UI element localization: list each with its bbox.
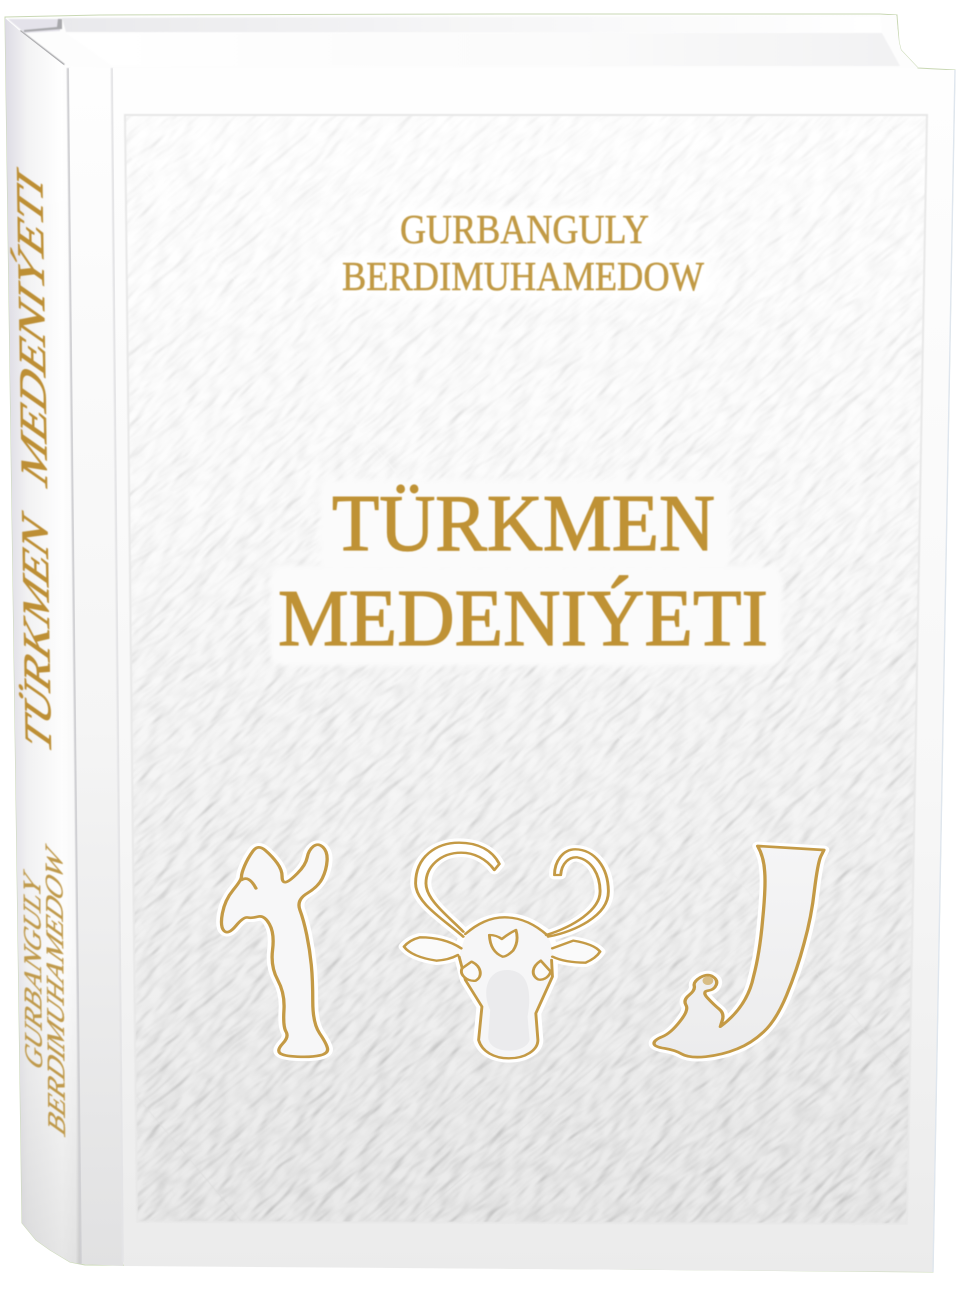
spine hinge groove	[68, 68, 81, 1264]
spine	[5, 18, 81, 1264]
book title: TÜRKMEN	[332, 480, 715, 568]
author name: BERDIMUHAMEDOW	[342, 253, 704, 299]
spine title: MEDENIÝETI	[9, 160, 56, 496]
spine author name: BERDIMUHAMEDOW	[41, 839, 71, 1142]
artifact icons	[221, 843, 824, 1058]
page edge right side highlight	[933, 70, 955, 1272]
icon: bull head	[404, 843, 608, 1058]
joint outer groove	[112, 68, 123, 1262]
spine title: TÜRKMEN	[14, 504, 60, 763]
front cover joint strip	[69, 68, 123, 1266]
top edge of book	[6, 15, 918, 68]
book title	[270, 480, 782, 666]
embossed ornamental panel	[125, 115, 927, 1224]
icon: rhyton horn	[654, 846, 824, 1057]
spine author name	[18, 839, 71, 1142]
spine title	[9, 160, 60, 763]
author name	[334, 206, 712, 299]
spine author name: GURBANGULY	[18, 865, 48, 1076]
author name: GURBANGULY	[400, 206, 649, 252]
book title: MEDENIÝETI	[278, 575, 768, 663]
icon: human figurine	[221, 845, 328, 1057]
